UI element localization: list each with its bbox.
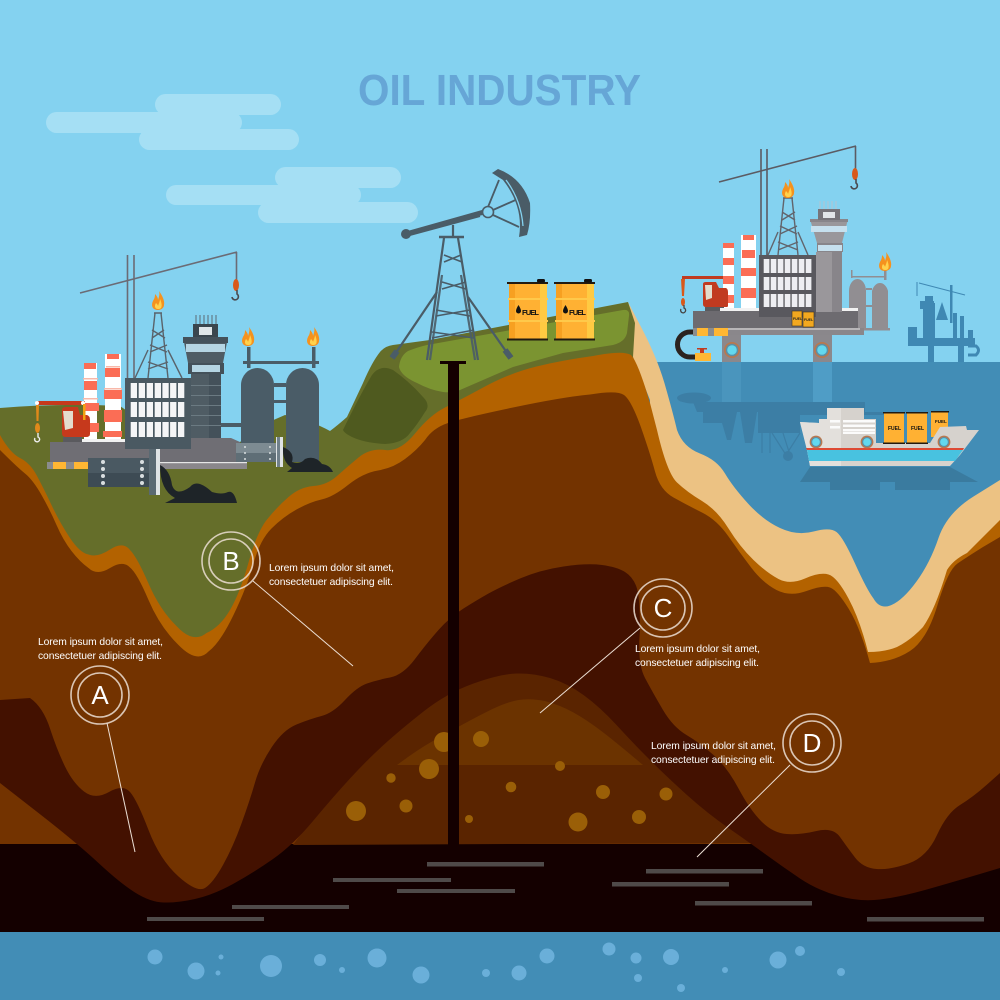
rig derrick flare (782, 179, 794, 198)
right striped chimney (103, 354, 122, 439)
title: OIL INDUSTRY (358, 66, 641, 115)
barrel 2: FUEL (569, 308, 586, 317)
rig excavator (681, 276, 728, 313)
callout A (38, 637, 163, 852)
offshore oil rig (677, 146, 891, 362)
callout A: Lorem ipsum dolor sit amet, (38, 637, 163, 648)
office building (125, 378, 191, 449)
clouds (46, 94, 418, 223)
tank flares (242, 327, 319, 346)
inner oil dome (397, 699, 643, 765)
well shaft (440, 361, 466, 845)
dark hill patch (343, 368, 428, 444)
hull left lighter part (800, 408, 841, 466)
rig building (759, 255, 816, 317)
left striped chimney (83, 363, 99, 439)
rig chimneys (723, 235, 756, 310)
barrels on ship: FUEL (888, 426, 901, 432)
oil bubbles in dome (346, 731, 672, 832)
small barrels on rig: FUEL (804, 318, 814, 322)
rig reflection in water (677, 362, 888, 461)
callout B (202, 532, 394, 666)
rig pipes (677, 328, 728, 361)
main brown earth layer (0, 392, 1000, 844)
oil pile behind tanks (283, 447, 333, 472)
barrel 1: FUEL (522, 308, 539, 317)
callout B: B (222, 546, 240, 576)
third barrel on ship (931, 411, 949, 437)
callout C: C (654, 593, 672, 623)
sky background (0, 0, 1000, 620)
callout D: D (803, 728, 821, 758)
oil pile (160, 465, 237, 503)
red waterline (806, 448, 964, 450)
control tower (183, 315, 228, 438)
rig tanks (849, 268, 890, 330)
callout A: consectetuer adipiscing elit. (38, 651, 162, 662)
excavator (35, 401, 90, 442)
small barrels on rig: FUEL (793, 317, 803, 321)
ship portholes (810, 436, 950, 448)
crane hook (232, 279, 239, 300)
callout A: A (91, 680, 109, 710)
rig tank flare (879, 252, 891, 271)
oil dome (293, 668, 750, 845)
olive ground (0, 302, 645, 700)
distant oil rig silhouette (908, 282, 978, 362)
derrick with flare (135, 313, 182, 378)
deep rock band (0, 564, 1000, 903)
hull (800, 408, 979, 466)
barrels on ship (883, 412, 928, 444)
rig crane hook (851, 168, 858, 189)
pipe block with bolts (88, 449, 160, 495)
onshore refinery (35, 252, 333, 503)
callout D: consectetuer adipiscing elit. (651, 755, 775, 766)
underground water (0, 932, 1000, 1000)
sea (600, 362, 1000, 622)
right pipe block (236, 437, 283, 467)
callout D: Lorem ipsum dolor sit amet, (651, 741, 776, 752)
flare on derrick (152, 291, 164, 310)
refinery base (47, 438, 247, 469)
black oil layer (0, 844, 1000, 932)
sand sea bed (628, 302, 1000, 1000)
rig deck (693, 308, 864, 362)
fuel barrels on hill (507, 279, 595, 340)
rig legs portholes (724, 342, 830, 358)
oil deposit streaks (147, 862, 984, 922)
callout C: Lorem ipsum dolor sit amet, (635, 644, 760, 655)
water bubbles (148, 942, 845, 992)
rig derrick (768, 198, 808, 255)
callout D (651, 714, 841, 857)
callout B: consectetuer adipiscing elit. (269, 577, 393, 588)
callout C: consectetuer adipiscing elit. (635, 658, 759, 669)
third barrel on ship: FUEL (935, 419, 947, 424)
pump jack (392, 169, 530, 360)
orange soil layer (0, 353, 1000, 1000)
rig crane (719, 146, 856, 255)
tanker ship (800, 408, 979, 466)
rig tower (810, 201, 848, 312)
crane masts and boom (80, 252, 237, 378)
tanker ship reflection (800, 467, 978, 490)
barrels on ship: FUEL (911, 426, 924, 432)
callout C (540, 579, 760, 713)
cyan hull band (807, 450, 963, 461)
storage tanks (221, 347, 319, 462)
cabin windows (830, 420, 875, 434)
hilltop light green (399, 310, 629, 392)
brown rock lobes reaching into oil layer (148, 843, 935, 895)
callout B: Lorem ipsum dolor sit amet, (269, 563, 394, 574)
small barrels on rig (792, 311, 814, 327)
